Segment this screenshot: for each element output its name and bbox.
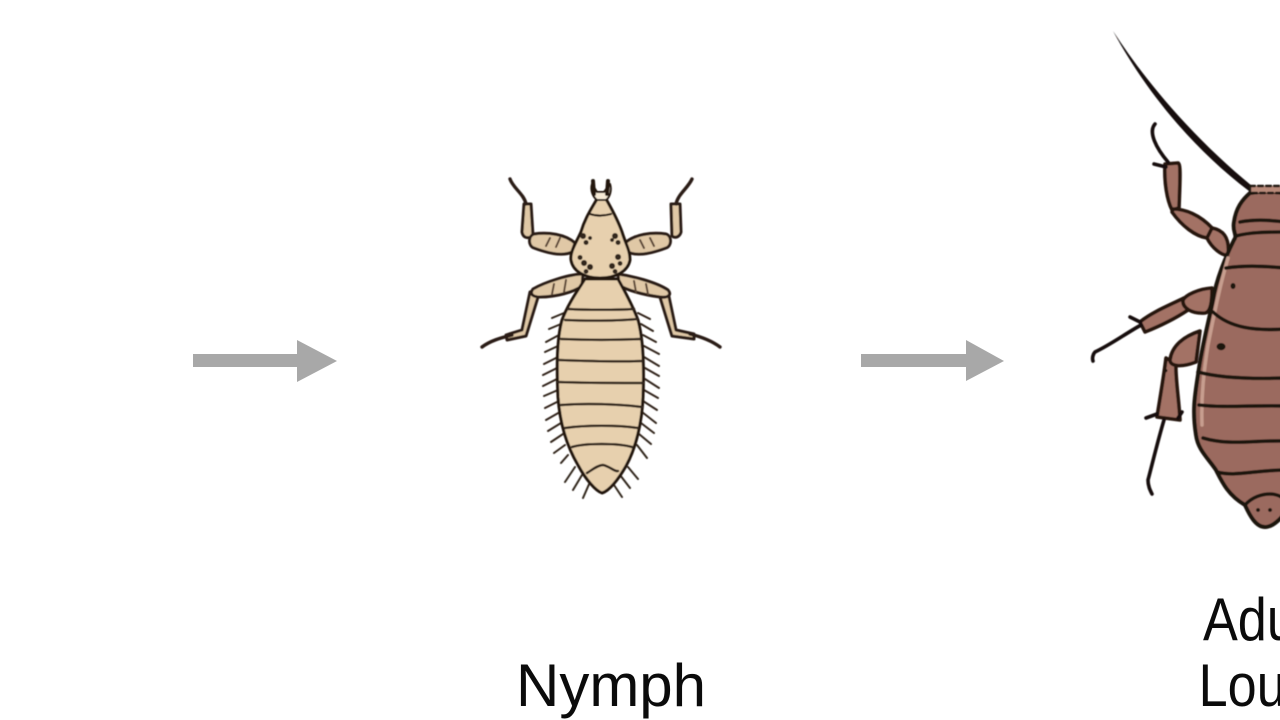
label: nymph: Nymph <box>516 652 706 719</box>
adult spots <box>1165 283 1272 512</box>
nymph legs <box>506 204 694 340</box>
adult highlight <box>1202 258 1228 425</box>
nymph claws <box>482 179 720 347</box>
nymph head speckles <box>578 233 622 274</box>
nymph leg markings <box>546 238 654 294</box>
arrow: nymph to adult <box>861 340 1004 381</box>
arrow: egg to nymph <box>193 340 337 382</box>
icon: adult louse <box>1093 31 1280 527</box>
nymph abdomen <box>557 279 643 493</box>
nymph segment lines <box>558 309 643 473</box>
adult antenna <box>1113 31 1252 191</box>
adult legs <box>1140 163 1228 420</box>
adult claws <box>1093 124 1182 494</box>
adult head beads <box>1250 186 1280 193</box>
nymph head <box>571 199 630 278</box>
adult segment lines <box>1198 220 1280 505</box>
nymph antennae <box>591 184 611 200</box>
icon: nymph louse <box>482 179 720 498</box>
nymph bristles <box>543 313 659 498</box>
adult body <box>1194 192 1280 527</box>
